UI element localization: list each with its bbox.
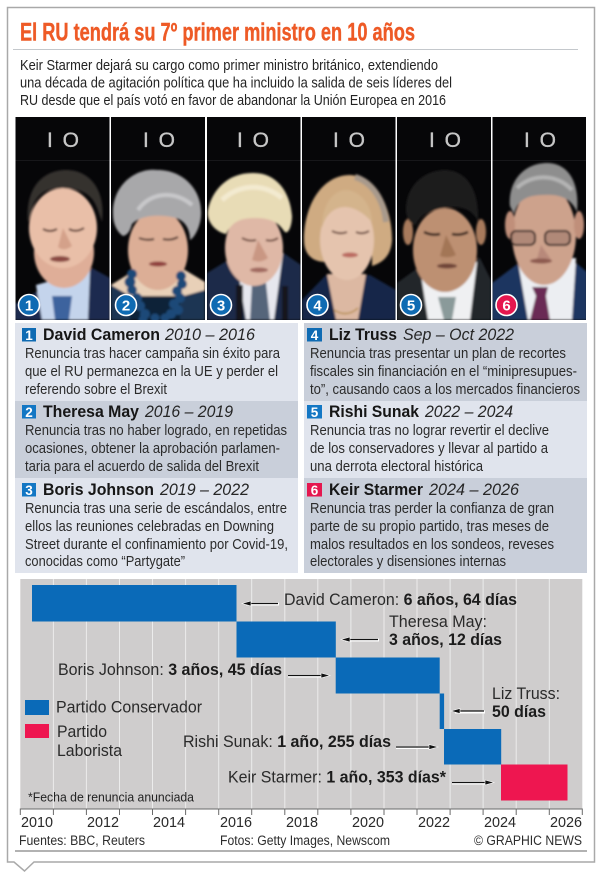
axis labels: 2020 <box>352 814 384 831</box>
panel: Rishi Sunak: Rishi Sunak <box>329 402 419 421</box>
label: David Cameron: David Cameron: 6 años, 64 días <box>284 591 517 609</box>
source line <box>19 833 582 848</box>
badge 4 <box>307 294 328 316</box>
panel: Rishi Sunak: 5 <box>311 405 319 420</box>
badge 5: 5 <box>407 298 415 314</box>
photo: David Cameron: I O <box>47 129 79 152</box>
axis labels: 2022 <box>418 814 450 831</box>
badge 3 <box>210 294 232 316</box>
photo: Keir Starmer: I O <box>524 129 556 152</box>
arrow: Cameron <box>242 601 279 606</box>
label: Liz Truss <box>492 685 560 721</box>
panel: Liz Truss: Renuncia tras presentar un plan de recortes <box>310 345 566 362</box>
panel: Liz Truss: Sep – Oct 2022 <box>403 325 515 344</box>
panel: Theresa May: 2016 – 2019 <box>144 402 233 421</box>
panel: Boris Johnson: 2019 – 2022 <box>159 480 250 499</box>
panel: Boris Johnson <box>15 478 298 573</box>
panel: Theresa May: ocasiones, obtener la aprobación parlamen- <box>25 440 280 457</box>
panel: David Cameron: Renuncia tras hacer campaña sin éxito para <box>25 345 281 362</box>
panel: Rishi Sunak <box>304 401 587 478</box>
panel: David Cameron: que el RU permanezca en la UE y perder el <box>25 363 278 380</box>
panel: Keir Starmer: Keir Starmer <box>329 480 423 499</box>
axis labels <box>21 814 582 831</box>
bar: Keir Starmer <box>501 764 568 800</box>
label: Theresa May <box>389 613 502 649</box>
axis labels: 2010 <box>21 814 53 831</box>
panel: David Cameron: 2010 – 2016 <box>164 325 256 344</box>
arrow: Johnson <box>288 673 330 678</box>
panel: Keir Starmer: Renuncia tras perder la confianza de gran <box>310 500 554 517</box>
title: El RU tendrá su 7º primer ministro en 10 años <box>20 18 415 46</box>
badge 5 <box>400 294 422 316</box>
photo: Rishi Sunak <box>397 117 491 320</box>
panel: Keir Starmer: 2024 – 2026 <box>428 480 520 499</box>
photo: Rishi Sunak: I O <box>429 129 461 152</box>
axis labels: 2026 <box>550 814 582 831</box>
panel: Boris Johnson: 3 <box>25 483 33 498</box>
source line: © GRAPHIC NEWS <box>474 833 582 848</box>
legend: Partido Conservador <box>56 699 202 717</box>
bar: David Cameron <box>32 585 236 622</box>
panel: Keir Starmer: malos resultados en los sondeos, reveses <box>310 536 554 553</box>
panel: David Cameron: referendo sobre el Brexit <box>25 381 168 398</box>
panel: David Cameron: 1 <box>25 328 33 343</box>
source line: Fotos: Getty Images, Newscom <box>220 833 390 848</box>
label: Boris Johnson: Boris Johnson: 3 años, 45 días <box>58 661 282 679</box>
badge 2: 2 <box>122 298 130 314</box>
panel: Keir Starmer: 6 <box>311 483 319 498</box>
panel: David Cameron: David Cameron <box>43 325 160 344</box>
badge 2 <box>116 294 136 316</box>
bar: Theresa May <box>236 622 336 658</box>
axis labels: 2016 <box>220 814 252 831</box>
label: Liz Truss: 50 días <box>492 703 546 721</box>
source line: Fuentes: BBC, Reuters <box>19 833 145 848</box>
bar: Rishi Sunak <box>444 729 501 764</box>
panel: Rishi Sunak: 2022 – 2024 <box>424 402 513 421</box>
photo: Boris Johnson: I O <box>237 129 269 152</box>
panel: Liz Truss: 4 <box>311 328 319 343</box>
panel: David Cameron <box>15 323 298 401</box>
photo: Keir Starmer <box>492 117 587 320</box>
intro text: RU desde que el país votó en favor de abandonar la Unión Europea en 2016 <box>20 92 446 109</box>
panel: Boris Johnson: ellos las reuniones celebradas en Downing <box>25 518 274 535</box>
arrow: Starmer <box>452 780 494 785</box>
badge 1: 1 <box>25 298 33 314</box>
label: Theresa May: 3 años, 12 días <box>389 631 502 649</box>
panel: Theresa May <box>15 401 298 478</box>
photo: Liz Truss <box>302 117 396 320</box>
footnote: *Fecha de renuncia anunciada <box>28 790 195 804</box>
axis labels: 2024 <box>484 814 516 831</box>
axis labels: 2014 <box>153 814 185 831</box>
photo: Boris Johnson <box>207 117 301 320</box>
legend <box>25 699 202 760</box>
panel: Theresa May: taria para el acuerdo de salida del Brexit <box>25 458 260 475</box>
badge 6 <box>496 294 517 316</box>
panel: Theresa May: Renuncia tras no haber logrado, en repetidas <box>25 422 287 439</box>
panel: Boris Johnson: Boris Johnson <box>43 480 154 499</box>
bar: Liz Truss <box>440 694 444 729</box>
timeline chart <box>20 579 582 831</box>
badge 6: 6 <box>502 298 511 314</box>
intro text: Keir Starmer dejará su cargo como primer ministro británico, extendiendo <box>20 57 438 74</box>
legend: Laborista <box>57 742 123 760</box>
panel: Liz Truss: Liz Truss <box>329 325 397 344</box>
arrow: Sunak <box>396 744 438 750</box>
photo: Theresa May: I O <box>143 129 175 152</box>
photo strip <box>15 117 587 324</box>
axis labels: 2018 <box>286 814 318 831</box>
legend: Partido <box>57 723 107 741</box>
panel: Theresa May: 2 <box>25 405 33 420</box>
arrow: May <box>341 637 379 642</box>
photo: Theresa May <box>111 117 205 324</box>
badge 3: 3 <box>217 298 225 314</box>
arrow: Truss <box>451 708 485 714</box>
label: Theresa May: Theresa May: <box>389 613 487 631</box>
panel: Rishi Sunak: Renuncia tras no lograr revertir el declive <box>310 422 549 439</box>
panel: Boris Johnson: conocidas como “Partygate” <box>25 553 185 570</box>
intro text: una década de agitación política que ha incluido la salida de seis líderes del <box>20 74 452 92</box>
panel: Boris Johnson: Street durante el confinamiento por Covid-19, <box>25 536 288 553</box>
panel: Keir Starmer: parte de su propio partido, tras meses de <box>310 518 549 535</box>
label: Rishi Sunak: Rishi Sunak: 1 año, 255 días <box>183 733 391 751</box>
panel: Boris Johnson: Renuncia tras una serie de escándalos, entre <box>25 500 287 517</box>
badge 4: 4 <box>313 298 322 314</box>
panel: Liz Truss <box>304 323 587 401</box>
label: Liz Truss: Liz Truss: <box>492 685 560 703</box>
panel: Rishi Sunak: de los conservadores y llevar al partido a <box>310 440 549 457</box>
badge 1 <box>18 294 40 316</box>
bar: Boris Johnson <box>336 658 440 694</box>
panel: Keir Starmer <box>304 478 587 573</box>
axis labels: 2012 <box>87 814 119 831</box>
panel: Rishi Sunak: una derrota electoral histórica <box>310 458 484 475</box>
intro text <box>20 57 452 109</box>
panel: Keir Starmer: electorales y disensiones internas <box>310 553 506 570</box>
photo: David Cameron <box>15 117 110 320</box>
panel: Theresa May: Theresa May <box>43 402 140 421</box>
photo: Liz Truss: I O <box>333 129 365 152</box>
label: Keir Starmer: Keir Starmer: 1 año, 353 días* <box>228 768 447 786</box>
